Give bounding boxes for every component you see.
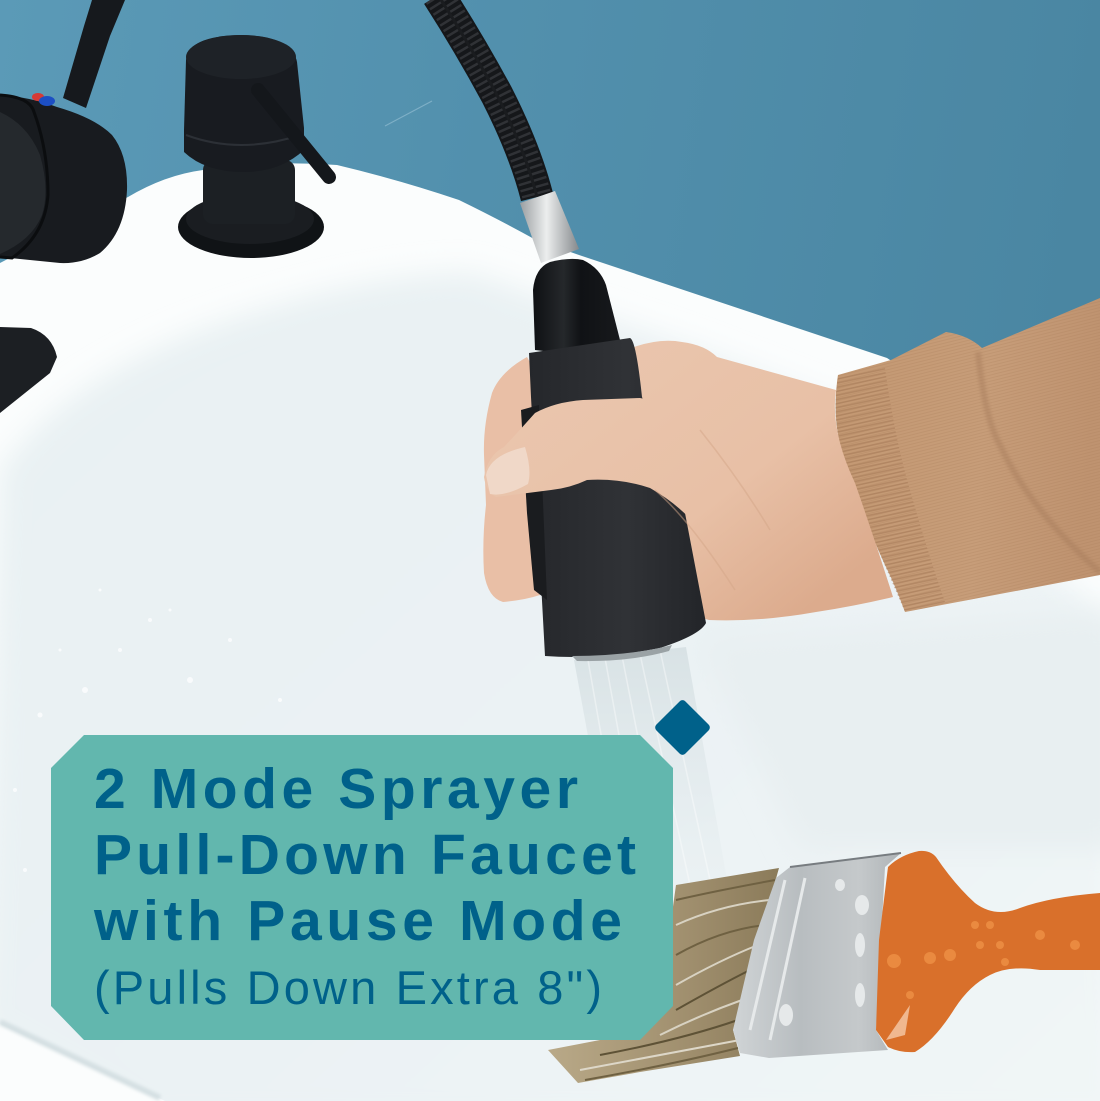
thumb [484,398,770,590]
sweater sleeve [836,298,1100,612]
title [93,757,636,953]
bristles [548,868,779,1083]
sprayer head [521,259,706,661]
metal connector [520,191,579,263]
title: 2 Mode Sprayer [94,757,578,821]
base plate [0,327,57,413]
water droplets on sink [13,588,282,872]
subtitle: (Pulls Down Extra 8") [94,961,602,1014]
water stream [574,647,727,910]
title: with Pause Mode [93,889,622,953]
sprayer body [529,338,706,657]
hand [483,341,893,620]
thumbnail [486,447,529,495]
sprayer neck [533,259,620,360]
knit cuff ribbing [836,368,945,612]
icon: diamond marker [654,699,711,756]
indicator buttons [32,93,44,101]
orange handle [876,851,1100,1052]
cuff fold shadow [978,352,1100,572]
title: Pull-Down Faucet [94,823,636,887]
faucet body [0,0,127,413]
pull-down hose [438,0,579,263]
nozzle [572,645,672,661]
side clip [521,405,547,600]
spout stem [63,0,125,108]
handle [0,95,127,263]
callout panel [51,735,673,1040]
pump lever [258,90,329,177]
metal ferrule [733,853,901,1058]
soap dispenser [178,35,329,258]
paint brush [548,851,1100,1083]
